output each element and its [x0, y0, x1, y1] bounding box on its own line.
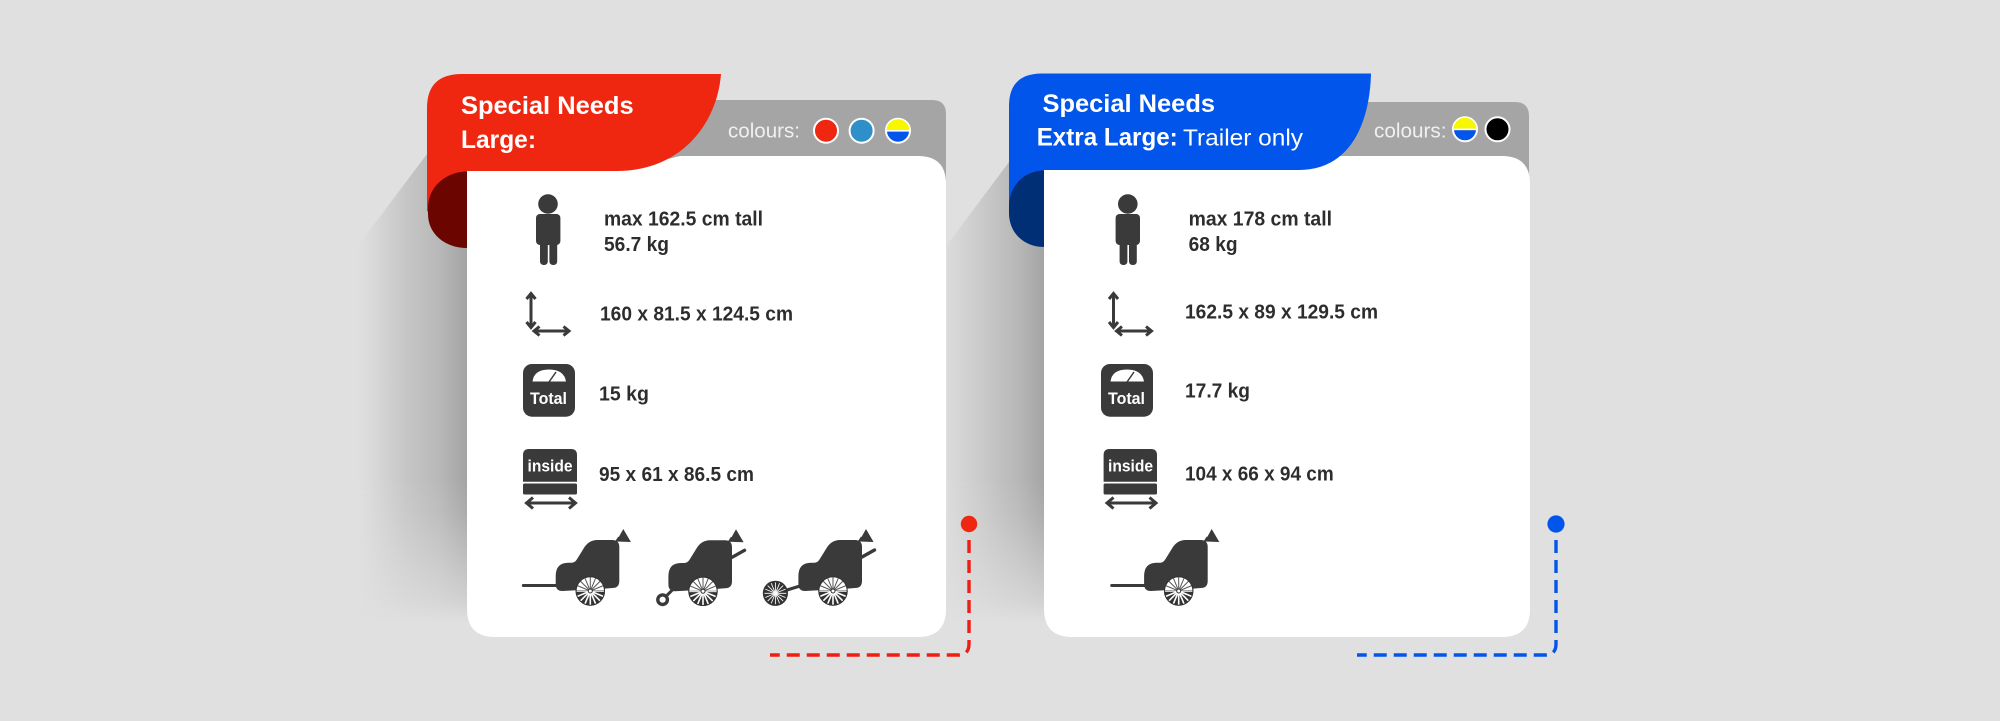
grey header tab — [1300, 102, 1529, 180]
panel: Special Needs Large — [427, 74, 946, 637]
long shadow: extra large card — [953, 162, 1044, 610]
dark banner fold — [1009, 170, 1044, 247]
icon: person — [1116, 194, 1140, 265]
colour swatch: yellow and blue — [1453, 117, 1477, 141]
user size text: 56.7 kg — [604, 233, 669, 256]
user size text: max 178 cm tall — [1189, 208, 1332, 231]
outer dimensions text: 162.5 x 89 x 129.5 cm — [1185, 301, 1378, 324]
icon: inside dimensions — [523, 449, 577, 508]
weight text: 17.7 kg — [1185, 379, 1250, 402]
connector: blue dashed line with dot — [1357, 515, 1565, 655]
icon: trailer with hitch arm — [523, 529, 631, 606]
dark banner fold — [428, 172, 467, 248]
red banner — [427, 74, 721, 212]
icon: scale total — [523, 364, 575, 417]
heading: Extra Large: — [1037, 124, 1178, 152]
outer dimensions text: 160 x 81.5 x 124.5 cm — [600, 303, 793, 326]
inside dimensions text: 104 x 66 x 94 cm — [1185, 463, 1334, 486]
connector: red dashed line with dot — [770, 516, 977, 655]
heading: Trailer only — [1183, 125, 1303, 151]
heading — [1037, 90, 1303, 152]
user size text: 68 kg — [1189, 233, 1238, 256]
user size text — [604, 208, 763, 256]
icon: dimension arrows — [1109, 294, 1152, 336]
blue banner — [1009, 74, 1371, 208]
user size text — [1189, 208, 1332, 256]
icon: inside dimensions: inside — [1108, 458, 1153, 476]
inside dimensions text: 95 x 61 x 86.5 cm — [599, 463, 754, 486]
icon: scale total: Total — [1108, 390, 1145, 408]
icon: trailer with hitch arm — [1112, 529, 1219, 606]
weight text: 15 kg — [599, 383, 649, 406]
icon: stroller with small wheel — [658, 529, 744, 606]
heading: Special Needs — [461, 92, 634, 120]
icon: scale total — [1101, 364, 1153, 417]
colour swatch: yellow and blue — [886, 119, 910, 143]
heading — [461, 92, 634, 154]
white card — [467, 156, 946, 637]
icon: jogger with front wheel — [763, 529, 874, 606]
colours label: colours: — [728, 120, 800, 142]
white card top — [467, 156, 918, 200]
user size text: max 162.5 cm tall — [604, 208, 763, 231]
icon: person — [536, 194, 560, 265]
long shadow: large card — [374, 154, 467, 610]
grey header tab — [600, 100, 946, 180]
colours label: colours: — [1374, 120, 1446, 142]
icon: dimension arrows — [526, 294, 569, 336]
heading: Large: — [461, 126, 536, 154]
heading: Special Needs — [1042, 90, 1215, 118]
colour swatch: red — [814, 119, 838, 143]
icon: inside dimensions — [1104, 449, 1157, 508]
colour swatch: black — [1486, 117, 1510, 141]
icon: scale total: Total — [530, 390, 567, 408]
panel: Special Needs Extra Large — [1009, 74, 1530, 637]
colour swatch: blue — [850, 119, 874, 143]
icon: inside dimensions: inside — [528, 458, 572, 476]
white card — [1044, 156, 1530, 637]
